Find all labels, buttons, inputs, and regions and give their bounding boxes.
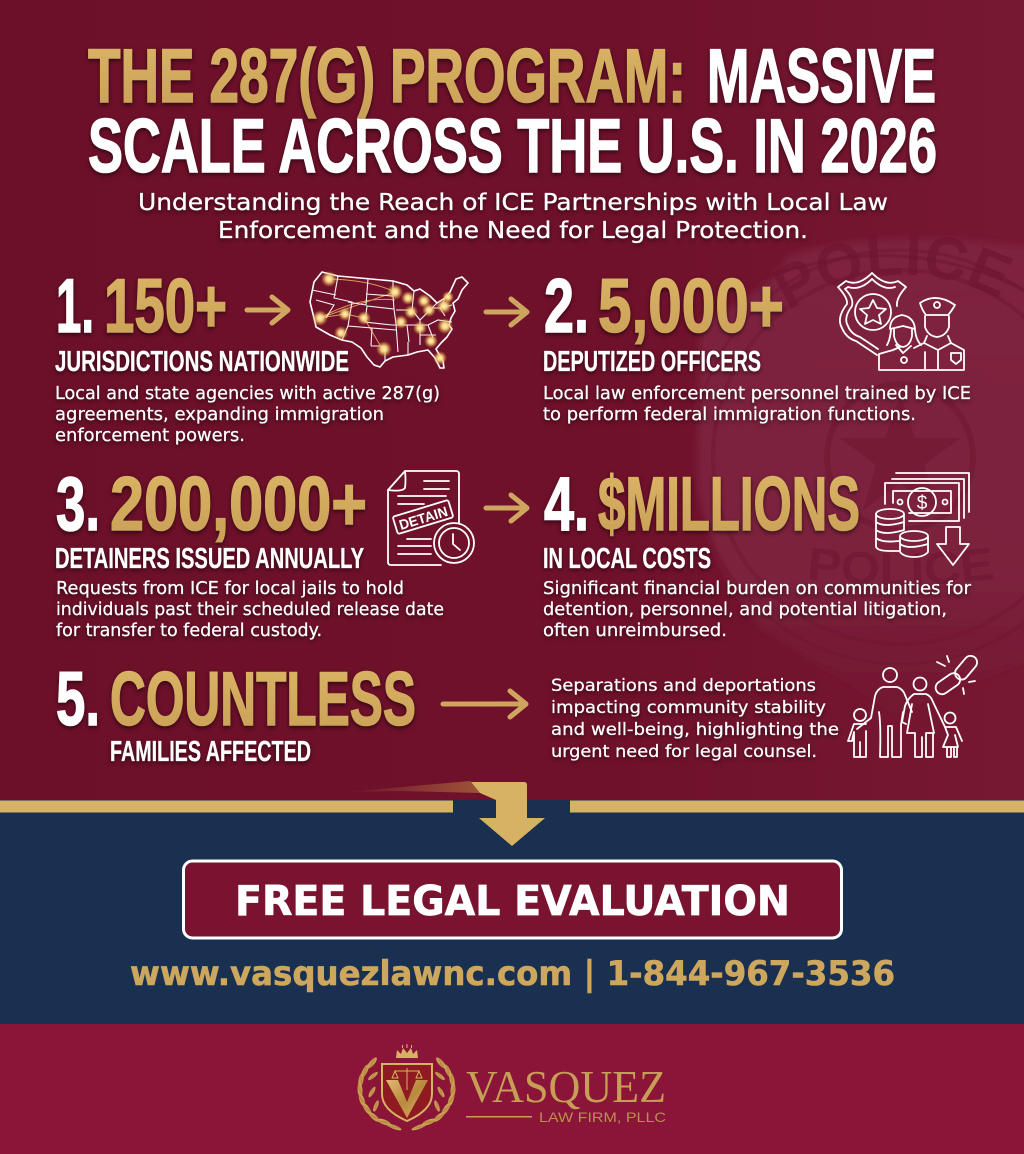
logo shield [382, 1064, 432, 1121]
logo wreath right [411, 1056, 456, 1132]
stat 5: families: COUNTLESS [110, 657, 416, 742]
button: free legal evaluation [184, 861, 842, 938]
footer band [0, 1024, 1024, 1154]
arrow [486, 299, 527, 325]
icon: money and coins: $ [917, 493, 928, 514]
stat 3: detainers: 200,000+ [110, 462, 367, 547]
stat 1: jurisdictions: 1. [56, 264, 94, 349]
icon: US map [310, 271, 468, 368]
title [88, 34, 937, 189]
stat 4: local costs [543, 462, 972, 641]
background: burgundy upper panel [0, 0, 1024, 801]
stat 5: families: FAMILIES AFFECTED [110, 736, 311, 768]
stat 5: families: 5. [56, 657, 100, 742]
logo: Vasquez Law Firm [357, 1044, 666, 1132]
stat 4: local costs: IN LOCAL COSTS [543, 543, 711, 575]
stat 2: deputized officers: Local law enforcement personnel trained by ICE [543, 384, 971, 404]
stat 2: deputized officers: DEPUTIZED OFFICERS [543, 346, 761, 378]
stat 2: deputized officers: 2. [544, 264, 589, 349]
stat 3: detainers [55, 462, 444, 641]
logo crown [396, 1044, 418, 1058]
title: THE 287(G) PROGRAM: [88, 34, 686, 119]
stat 2: deputized officers: 5,000+ [598, 264, 784, 349]
stat 1: jurisdictions: enforcement powers. [55, 426, 245, 446]
icon: detain document: DETAIN [397, 503, 450, 533]
arrow [247, 297, 288, 323]
watermark: police badge: POLICE [774, 238, 1013, 308]
stat 1: jurisdictions: JURISDICTIONS NATIONWIDE [55, 346, 349, 378]
subtitle: Understanding the Reach of ICE Partnerships with Local Law [138, 190, 888, 216]
gold divider bars [0, 800, 1024, 812]
stat 3: detainers: 3. [56, 462, 100, 547]
stat 1: jurisdictions: agreements, expanding immigration [55, 405, 384, 425]
stat 4: local costs: Significant financial burden on communities for [543, 579, 972, 599]
description 5: and well-being, highlighting the [551, 720, 839, 739]
stat 2: deputized officers [543, 264, 971, 425]
stat 1: jurisdictions: 150+ [104, 264, 227, 349]
icon: detain document [388, 471, 474, 565]
description 5: urgent need for legal counsel. [551, 742, 817, 761]
button: free legal evaluation: FREE LEGAL EVALUATION [235, 877, 790, 925]
stat 3: detainers: Requests from ICE for local jails to hold [56, 579, 404, 599]
stat 1: jurisdictions: Local and state agencies with active 287(g) [55, 384, 440, 404]
icon: money and coins [876, 473, 969, 565]
stat 4: local costs: often unreimbursed. [543, 621, 727, 641]
logo scales [392, 1068, 422, 1090]
stat 3: detainers: individuals past their scheduled release date [56, 600, 444, 620]
logo: Vasquez Law Firm: LAW FIRM, PLLC [539, 1109, 666, 1125]
stat 2: deputized officers: to perform federal immigration functions. [543, 405, 916, 425]
logo wreath left [357, 1056, 402, 1132]
arrow [443, 691, 526, 717]
description 5: Separations and deportations [551, 676, 816, 695]
stat 3: detainers: DETAINERS ISSUED ANNUALLY [55, 543, 364, 575]
stat 1: jurisdictions [55, 264, 440, 446]
watermark: police badge [696, 238, 1024, 646]
logo wordmark: VASQUEZ [466, 1062, 666, 1112]
watermark: police badge: POLICE [810, 548, 993, 582]
description 5: impacting community stability [551, 698, 826, 717]
subtitle [138, 190, 888, 244]
stat 4: local costs: $MILLIONS [598, 462, 860, 547]
icon: family with broken chain [848, 653, 980, 757]
stat 5: families [56, 657, 416, 768]
arrow [486, 495, 527, 521]
subtitle: Enforcement and the Need for Legal Protection. [218, 218, 808, 244]
stat 3: detainers: for transfer to federal custody. [56, 621, 322, 641]
stat 4: local costs: detention, personnel, and potential litigation, [543, 600, 947, 620]
icon: police badge and officers [838, 273, 964, 370]
description 5 [551, 676, 839, 761]
logo V mark [386, 1080, 428, 1118]
stat 4: local costs: 4. [544, 462, 589, 547]
navy call-to-action band [0, 800, 1024, 1024]
arrow: streak and down arrow [345, 781, 545, 846]
contact line: www.vasquezlawnc.com | 1-844-967-3536 [130, 954, 895, 994]
